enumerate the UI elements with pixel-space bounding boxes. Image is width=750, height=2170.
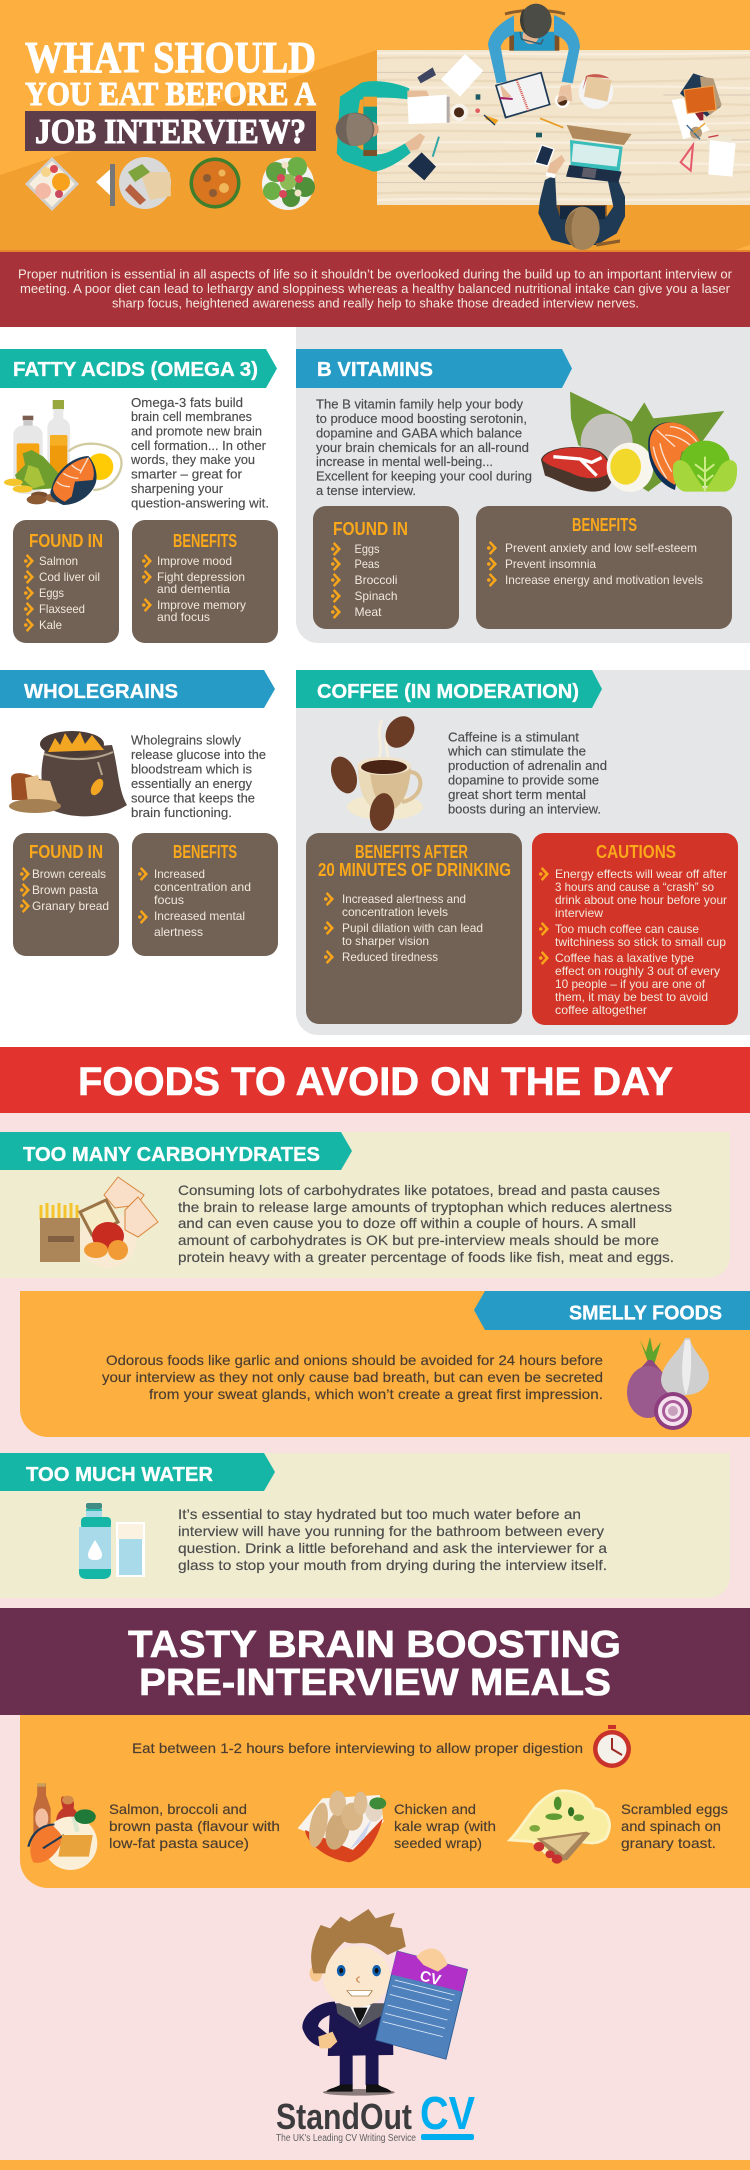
panel: B vitamins	[296, 349, 737, 629]
box: cautions: interview	[555, 906, 603, 920]
text: omega-3 description: and promote new brain	[131, 424, 262, 438]
illustration: CV character	[302, 1909, 467, 2096]
box: found in: Brown cereals	[32, 867, 106, 881]
text: omega-3 description: question-answering wit.	[131, 496, 269, 510]
box: benefits after 20 minutes: 20 MINUTES OF DRINKING	[318, 860, 511, 880]
box: benefits after 20 minutes: Reduced tiredness	[342, 950, 438, 964]
panel: intro band: Proper nutrition is essential in all aspects of life so it shouldn’t be overlooked during the build up to an important interview or	[18, 266, 733, 282]
icon: sandwich plate	[96, 157, 171, 209]
text: salmon meal: brown pasta (flavour with	[109, 1818, 280, 1834]
text: B vitamins description: a tense interview.	[316, 484, 416, 498]
text: wholegrains description: release glucose into the	[131, 748, 266, 762]
heading: brain boosting meals: TASTY BRAIN BOOSTING	[128, 1624, 621, 1666]
box: benefits: Increase energy and motivation levels	[505, 573, 703, 587]
text: carbohydrates description: Consuming lots of carbohydrates like potatoes, bread and pasta causes	[178, 1182, 660, 1198]
meal: chicken wrap	[297, 1791, 496, 1862]
text: salmon meal	[109, 1801, 280, 1851]
heading: foods to avoid: FOODS TO AVOID ON THE DAY	[78, 1060, 673, 1104]
box: found in: Brown pasta	[32, 883, 98, 897]
box: benefits after 20 minutes: concentration levels	[342, 905, 448, 919]
box: benefits after 20 minutes: Pupil dilation with can lead	[342, 921, 483, 935]
text: wholegrains description: brain functioning.	[131, 806, 232, 820]
box: benefits: concentration and	[154, 880, 251, 894]
ribbon: too much water: TOO MUCH WATER	[26, 1464, 214, 1486]
icon: salad bowl	[262, 157, 315, 210]
panel: too much water	[0, 1453, 730, 1598]
text: eggs meal: Scrambled eggs	[621, 1801, 728, 1817]
box: found in: Broccoli	[354, 573, 398, 587]
box: benefits: and dementia	[157, 582, 230, 596]
icon: soup bowl	[190, 158, 240, 208]
box: found in: Peas	[354, 557, 380, 571]
text: smelly foods description: your interview as they not only cause bad breath, but can even be secreted	[102, 1369, 603, 1385]
text: salmon meal: low-fat pasta sauce)	[109, 1835, 249, 1851]
panel: intro band	[0, 250, 750, 327]
footer band	[0, 2160, 750, 2170]
box: benefits: Increased	[154, 867, 205, 881]
illustration: wholegrain sack	[9, 731, 127, 816]
box: benefits: Prevent insomnia	[505, 557, 596, 571]
text: B vitamins description: your brain chemicals for an all-round	[316, 441, 529, 455]
notebook	[495, 72, 551, 119]
box: benefits	[476, 506, 732, 629]
box: cautions: drink about one hour before your	[555, 893, 727, 907]
box: found in: Granary bread	[32, 899, 109, 913]
box: benefits	[132, 520, 278, 643]
logo: StandOut CV: The UK's Leading CV Writing Service	[276, 2133, 416, 2144]
box: cautions: 10 people – if you are one of	[555, 977, 706, 991]
illustration: salmon and pasta	[28, 1783, 97, 1870]
panel: too many carbohydrates	[0, 1132, 730, 1278]
text: smelly foods description: Odorous foods like garlic and onions should be avoided for 24 hours before	[106, 1352, 603, 1368]
box: found in: Meat	[354, 605, 382, 619]
panel: header	[0, 0, 750, 252]
heading: foods to avoid	[0, 1047, 750, 1113]
text: water description: It’s essential to stay hydrated but too much water before an	[178, 1506, 581, 1522]
box: cautions: effect on roughly 3 out of every	[555, 964, 720, 978]
text: omega-3 description: sharpening your	[131, 482, 223, 496]
ribbon: B vitamins	[296, 349, 572, 388]
ribbon: smelly foods	[474, 1291, 750, 1330]
box: found in: FOUND IN	[29, 842, 103, 862]
text: omega-3 description: brain cell membranes	[131, 410, 252, 424]
text: carbohydrates description: and can even cause you to doze off within a couple of hours. A small	[178, 1215, 636, 1231]
text: carbohydrates description	[178, 1182, 674, 1265]
box: cautions: 3 hours and cause a “crash” so	[555, 880, 714, 894]
box: benefits: focus	[154, 893, 184, 907]
ribbon: wholegrains: WHOLEGRAINS	[24, 681, 178, 703]
title: YOU EAT BEFORE A	[25, 76, 316, 113]
box: benefits: Improve mood	[157, 554, 232, 568]
text: wholegrains description: Wholegrains slowly	[131, 734, 242, 748]
illustration: onion and garlic	[627, 1337, 709, 1430]
text: chicken meal: kale wrap (with	[394, 1818, 496, 1834]
panel: intro band: sharp focus, heightened awareness and really help to shake those dreaded interview nerves.	[112, 296, 639, 310]
panel: meals	[20, 1715, 750, 1888]
text: carbohydrates description: amount of carbohydrates is OK but pre-interview meals should be more	[178, 1232, 659, 1248]
text: carbohydrates description: the brain to release large amounts of tryptophan which reduces alertness	[178, 1199, 672, 1215]
title: WHAT SHOULD	[25, 33, 316, 82]
heading: brain boosting meals	[0, 1608, 750, 1715]
text: omega-3 description: Omega-3 fats build	[131, 396, 243, 410]
text: wholegrains description: essentially an energy	[131, 777, 253, 791]
text: smelly foods description	[102, 1352, 603, 1402]
text: omega-3 description: cell formation... In other	[131, 439, 266, 453]
text: omega-3 description: smarter – great for	[131, 468, 242, 482]
box: cautions	[532, 833, 738, 1025]
text: B vitamins description: The B vitamin family help your body	[316, 398, 524, 412]
box: benefits	[132, 833, 278, 956]
text: chicken meal: seeded wrap)	[394, 1835, 482, 1851]
box: cautions: Energy effects will wear off after	[555, 867, 727, 881]
person: interviewer left	[336, 81, 429, 172]
box: benefits: Prevent anxiety and low self-esteem	[505, 541, 697, 555]
ribbon: wholegrains	[0, 670, 275, 708]
box: cautions: coffee altogether	[555, 1003, 647, 1017]
box: benefits: BENEFITS	[173, 531, 237, 551]
box: benefits: alertness	[154, 925, 203, 939]
panel: wholegrains	[0, 670, 278, 956]
ribbon: B vitamins: B VITAMINS	[317, 359, 433, 381]
text: coffee description: boosts during an interview.	[448, 802, 601, 816]
illustration: wrap basket	[297, 1791, 386, 1862]
box: cautions: Coffee has a laxative type	[555, 951, 694, 965]
box: found in: FOUND IN	[29, 531, 103, 551]
text: coffee description: production of adrenalin and	[448, 759, 607, 773]
text: omega-3 description	[130, 396, 269, 510]
box: found in: Flaxseed	[39, 602, 85, 616]
box: cautions: CAUTIONS	[596, 842, 676, 862]
text: B vitamins description: increase in mental well-being...	[316, 455, 493, 469]
ribbon: too much water	[0, 1453, 275, 1491]
box: found in	[13, 833, 119, 956]
panel: intro band: meeting. A poor diet can lead to lethargy and sloppiness whereas a healthy balanced nutritional intake can give you a laser	[20, 281, 731, 296]
box: benefits after 20 minutes: Increased alertness and	[342, 892, 466, 906]
box: benefits: BENEFITS	[173, 842, 237, 862]
icon: fruit plate	[25, 157, 79, 211]
text: coffee description: which can stimulate the	[447, 744, 586, 758]
label: CV on paper: CV	[418, 1967, 442, 1989]
text: water description: glass to stop your mouth from drying during the interview itself.	[178, 1557, 607, 1573]
box: found in: Kale	[39, 618, 62, 632]
box: benefits after 20 minutes: BENEFITS AFTER	[355, 842, 468, 862]
box: benefits after 20 minutes	[306, 833, 522, 1024]
heading: brain boosting meals: PRE-INTERVIEW MEALS	[139, 1662, 611, 1704]
illustration: carbs	[40, 1177, 158, 1268]
text: coffee description	[447, 730, 607, 816]
box: found in	[313, 506, 459, 629]
box: cautions: Too much coffee can cause	[555, 922, 699, 936]
logo: StandOut CV	[276, 2087, 475, 2144]
person: interviewer top	[488, 4, 580, 83]
box: cautions: twitchiness so stick to small cup	[555, 935, 726, 949]
text: omega-3 description: words, they make you	[130, 453, 255, 467]
box: benefits after 20 minutes: to sharper vision	[342, 934, 429, 948]
box: benefits: Increased mental	[154, 909, 245, 923]
ribbon: carbohydrates: TOO MANY CARBOHYDRATES	[23, 1144, 320, 1166]
box: found in: Cod liver oil	[39, 570, 100, 584]
text: water description: question. Drink a little beforehand and ask the interviewer for a	[178, 1540, 607, 1556]
desk items	[407, 54, 613, 180]
text: wholegrains description: source that keeps the	[131, 792, 255, 806]
box: found in: Eggs	[354, 542, 380, 556]
box: benefits: Fight depression	[157, 570, 245, 584]
text: wholegrains description: bloodstream which is	[131, 762, 252, 776]
text: wholegrains description	[131, 734, 266, 820]
text: eggs meal: and spinach on	[621, 1818, 721, 1834]
panel: grey background B vitamins	[296, 327, 750, 643]
icon: clock	[593, 1725, 631, 1768]
panel: grey background coffee	[296, 670, 750, 1035]
box: found in: Salmon	[39, 554, 78, 568]
text: eating timing: Eat between 1-2 hours before interviewing to allow proper digestion	[132, 1740, 583, 1756]
title: JOB INTERVIEW?	[35, 112, 306, 151]
logo: StandOut CV: StandOut	[276, 2096, 412, 2137]
illustration: bottle and glass	[79, 1503, 145, 1579]
ribbon: smelly foods: SMELLY FOODS	[569, 1302, 722, 1324]
books and papers	[672, 73, 736, 177]
text: B vitamins description: dopamine and GABA which balance	[316, 426, 522, 440]
illustration: B vitamin foods	[541, 392, 737, 492]
text: coffee description: great short term mental	[448, 788, 586, 802]
ribbon: coffee: COFFEE (IN MODERATION)	[317, 681, 579, 703]
box: found in: FOUND IN	[333, 519, 408, 539]
ribbon: coffee	[296, 670, 602, 708]
text: chicken meal: Chicken and	[394, 1801, 476, 1817]
box: found in	[13, 520, 119, 643]
meal: scrambled eggs	[510, 1791, 728, 1864]
text: eggs meal: granary toast.	[621, 1835, 716, 1851]
text: coffee description: dopamine to provide some	[448, 774, 599, 788]
box: found in: Eggs	[39, 586, 64, 600]
ribbon: fatty acids	[0, 349, 277, 388]
table	[377, 50, 750, 205]
ribbon: fatty acids: FATTY ACIDS (OMEGA 3)	[13, 359, 258, 381]
illustration: eggs on toast	[510, 1791, 609, 1864]
text: carbohydrates description: protein heavy with a greater percentage of foods like fish, meat and eggs.	[178, 1249, 674, 1265]
meal: salmon pasta	[28, 1783, 280, 1870]
box: benefits: Improve memory	[157, 598, 246, 612]
text: chicken meal	[394, 1801, 496, 1851]
title	[25, 33, 316, 151]
laptop	[566, 125, 632, 183]
text: eggs meal	[621, 1801, 728, 1851]
illustration: coffee cup	[326, 711, 423, 833]
text: B vitamins description	[316, 398, 532, 498]
box: benefits: BENEFITS	[572, 515, 637, 535]
text: water description	[178, 1506, 607, 1573]
panel: coffee	[296, 670, 738, 1025]
text: coffee description: Caffeine is a stimulant	[448, 730, 580, 744]
table scene illustration	[336, 4, 750, 250]
box: found in: Spinach	[354, 589, 398, 603]
text: B vitamins description: Excellent for keeping your cool during	[316, 470, 532, 484]
logo: StandOut CV: CV	[420, 2087, 475, 2139]
person: candidate bottom	[538, 152, 625, 250]
text: salmon meal: Salmon, broccoli and	[109, 1801, 247, 1817]
box: benefits: and focus	[157, 610, 210, 624]
text: smelly foods description: from your sweat glands, which won’t create a great first impression.	[149, 1386, 603, 1402]
panel: fatty acids	[0, 349, 278, 643]
ribbon: carbohydrates	[0, 1132, 352, 1170]
panel: smelly foods	[20, 1291, 750, 1437]
text: water description: interview will have you running for the bathroom between every	[178, 1523, 604, 1539]
illustration: omega-3 foods	[4, 400, 122, 505]
text: B vitamins description: to produce mood boosting serotonin,	[316, 412, 527, 426]
box: cautions: them, it may be best to avoid	[555, 990, 708, 1004]
